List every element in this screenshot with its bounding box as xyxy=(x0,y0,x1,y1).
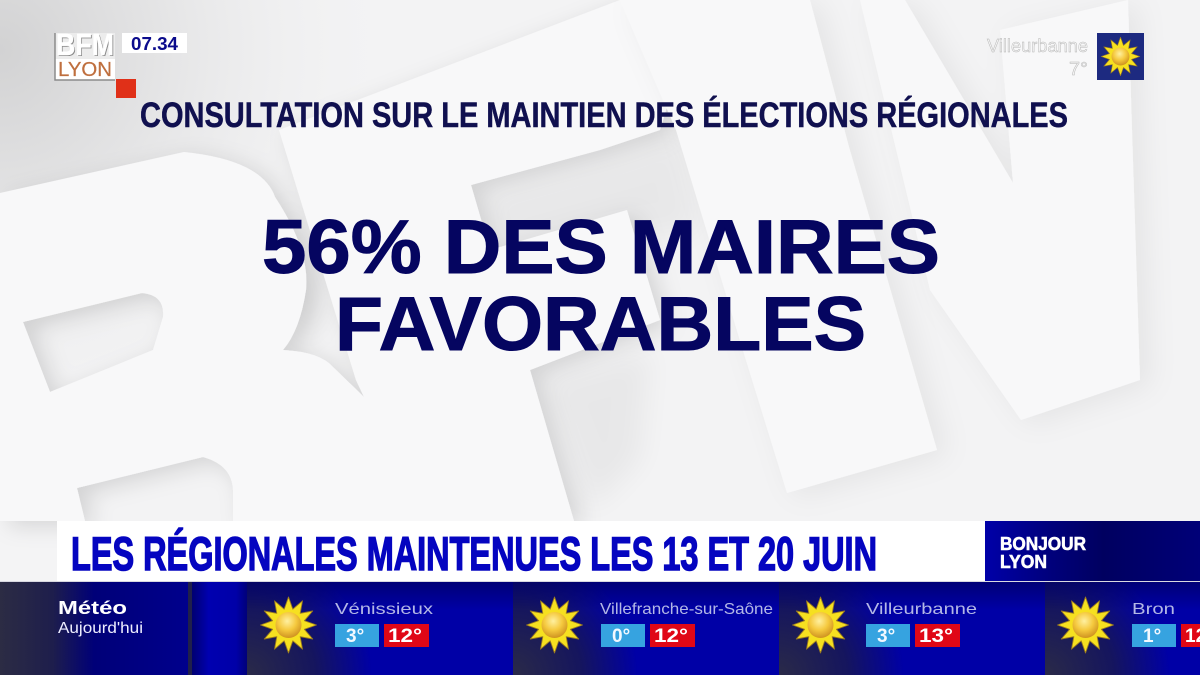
letter M left stem xyxy=(620,0,937,493)
panel: Vénissieux: 3° xyxy=(346,626,364,647)
panel: Villeurbanne: 13° xyxy=(919,626,953,647)
panel: Vénissieux: Vénissieux xyxy=(335,601,433,618)
programme tag: Bonjour Lyon: BONJOUR xyxy=(1000,534,1086,554)
panel: Bron xyxy=(1045,582,1200,675)
logo wordmark BFM: BFM xyxy=(57,28,115,63)
panel: Villefranche-sur-Saône xyxy=(513,582,779,675)
panel: Villeurbanne: 3° xyxy=(877,626,895,647)
weather strip xyxy=(0,581,1200,675)
panel: Météo heading xyxy=(0,582,192,675)
panel: Bron: Bron xyxy=(1132,601,1175,618)
top-right weather label xyxy=(987,36,1088,79)
panel: Bron: 1° xyxy=(1143,626,1161,647)
logo wordmark LYON: LYON xyxy=(58,59,112,81)
clock xyxy=(122,33,187,54)
panel: Villeurbanne xyxy=(779,582,1045,675)
panel: Villeurbanne: Villeurbanne xyxy=(866,601,977,618)
letter M diagonal and right stem xyxy=(860,0,1140,420)
panel: Météo heading: Météo xyxy=(58,598,127,618)
red square accent xyxy=(116,79,136,98)
logo: BFM Lyon xyxy=(55,27,115,81)
main headline: FAVORABLES xyxy=(335,282,866,367)
panel: Villefranche-sur-Saône: 12° xyxy=(654,626,688,647)
clock: 07.34 xyxy=(131,34,178,54)
background shading between letters xyxy=(285,130,700,510)
background xyxy=(0,0,1200,521)
programme tag: Bonjour Lyon: LYON xyxy=(1000,552,1047,572)
top-right weather label: 7° xyxy=(1069,59,1088,79)
letter B and F xyxy=(0,0,700,521)
panel: Vénissieux: 12° xyxy=(388,626,422,647)
main headline xyxy=(262,205,940,367)
logo wordmark BFM: BFM xyxy=(56,27,114,62)
icon: top-right sun xyxy=(1097,33,1144,80)
main headline: 56% DES MAIRES xyxy=(262,205,940,290)
panel: Villefranche-sur-Saône: Villefranche-sur-Saône xyxy=(600,601,773,618)
panel: Vénissieux xyxy=(247,582,513,675)
panel: Météo heading: Aujourd'hui xyxy=(58,620,143,637)
programme tag: Bonjour Lyon xyxy=(985,521,1200,581)
top-right weather label: Villeurbanne xyxy=(987,36,1088,56)
panel: Villefranche-sur-Saône: 0° xyxy=(612,626,630,647)
